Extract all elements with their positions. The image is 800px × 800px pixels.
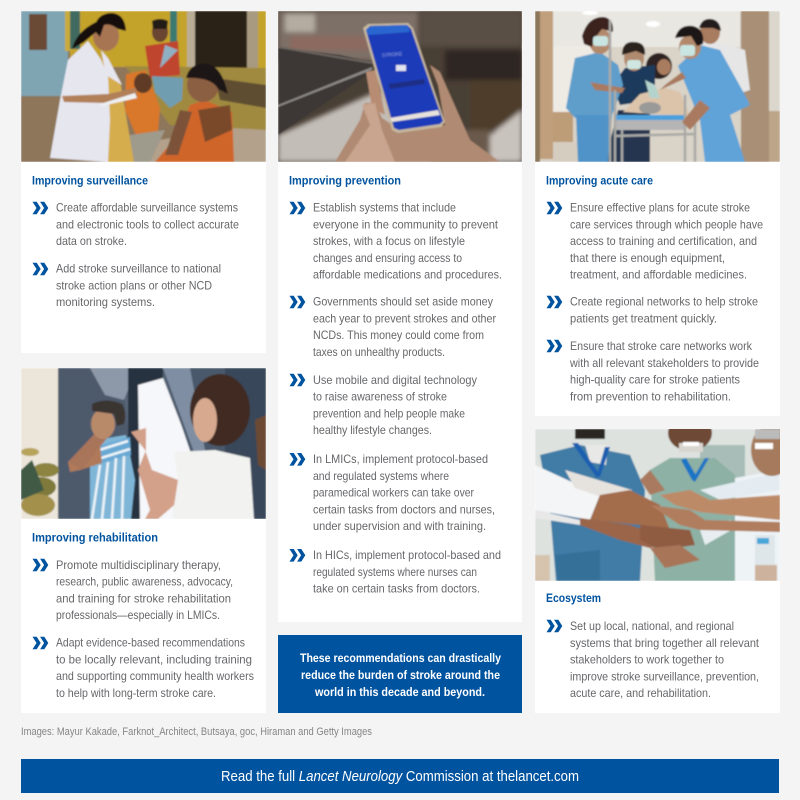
bullet: national plans: Add stroke surveillance to national — [56, 262, 221, 276]
panel: improving prevention — [278, 11, 522, 622]
photo: hand holding phone — [278, 11, 522, 162]
bullet: local and regional systems: stakeholders to work together to — [570, 653, 724, 667]
panel: improving acute care — [535, 11, 780, 416]
bullet: digital technology — [290, 373, 477, 437]
bullet: government money — [290, 294, 496, 359]
image credits: Images: Mayur Kakade, Farknot_Architect, Butsaya, goc, Hiraman and Getty Images — [21, 726, 372, 738]
banner: read the commission — [21, 759, 779, 793]
bullet: digital technology: prevention and help people make — [313, 406, 465, 420]
bullet: local and regional systems: systems that bring together all relevant — [570, 636, 760, 650]
bullet: surveillance systems: data on stroke. — [56, 234, 127, 248]
bullet: national plans: stroke action plans or other NCD — [56, 278, 212, 292]
bullet: local and regional systems: acute care, and rehabilitation. — [570, 686, 711, 700]
bullet: evidence-based recommendations: and supporting community health workers — [56, 669, 254, 683]
bullet: government money: Governments should set aside money — [313, 294, 493, 308]
photo: medical team with stretcher — [535, 11, 780, 162]
bullet: multidisciplinary therapy: research, public awareness, advocacy, — [56, 575, 233, 589]
bullet: community systems: changes and ensuring access to — [313, 251, 462, 265]
bullet: effective plans — [546, 200, 763, 282]
bullet: LMICs: and regulated systems where — [313, 469, 449, 483]
bullet: regional networks — [546, 294, 758, 325]
bullet: effective plans: Ensure effective plans for acute stroke — [570, 200, 750, 214]
bullet: community systems: affordable medications and procedures. — [313, 268, 502, 282]
bullet: effective plans: treatment, and affordable medicines. — [570, 268, 747, 282]
callout: key message — [278, 635, 522, 713]
bullet: multidisciplinary therapy: Promote multidisciplinary therapy, — [56, 558, 221, 572]
bullet: LMICs — [290, 452, 495, 533]
heading: Improving acute care — [546, 174, 653, 188]
callout: key message: world in this decade and beyond. — [314, 685, 485, 699]
bullet: effective plans: care services through which people have — [570, 217, 763, 231]
bullet: HICs — [290, 548, 501, 596]
bullet: LMICs: paramedical workers can take over — [313, 486, 474, 500]
bullet: community systems: Establish systems that include — [313, 200, 456, 214]
bullet: stakeholders: from prevention to rehabilitation. — [570, 389, 731, 403]
heading: Improving surveillance — [32, 174, 148, 188]
bullet: surveillance systems: Create affordable surveillance systems — [56, 200, 238, 214]
bullet: evidence-based recommendations: Adapt evidence-based recommendations — [56, 636, 245, 650]
bullet: community systems: strokes, with a focus on lifestyle — [313, 234, 465, 248]
bullet: digital technology: Use mobile and digital technology — [313, 373, 477, 387]
bullet: LMICs: under supervision and with training. — [313, 519, 486, 533]
photo: health worker with seated women — [21, 11, 266, 162]
panel: ecosystem — [535, 415, 793, 713]
bullet: stakeholders: with all relevant stakeholders to provide — [569, 356, 759, 370]
bullet: LMICs: certain tasks from doctors and nurses, — [313, 502, 495, 516]
bullet: local and regional systems: Set up local, national, and regional — [570, 619, 734, 633]
bullet: community systems — [290, 200, 502, 282]
bullet: evidence-based recommendations: to be locally relevant, including training — [56, 652, 252, 666]
bullet: HICs: take on certain tasks from doctors. — [313, 582, 480, 596]
heading: Ecosystem — [546, 591, 601, 605]
bullet: government money: taxes on unhealthy products. — [313, 345, 445, 359]
banner: read the commission: Read the full Lancet Neurology Commission at thelancet.com — [221, 769, 579, 785]
photo: team stacking hands — [535, 429, 780, 581]
bullet: community systems: everyone in the community to prevent — [313, 217, 499, 231]
bullet: local and regional systems — [546, 619, 760, 700]
panel: improving rehabilitation — [21, 368, 266, 713]
bullet: effective plans: access to training and certification, and — [570, 234, 757, 248]
bullet: stakeholders — [546, 339, 759, 403]
heading: Improving rehabilitation — [32, 530, 158, 544]
callout: key message: These recommendations can drastically — [300, 651, 501, 665]
bullet: surveillance systems: and electronic tools to collect accurate — [56, 217, 239, 231]
bullet: digital technology: to raise awareness of stroke — [313, 390, 447, 404]
bullet: national plans — [32, 262, 221, 309]
bullet: regional networks: Create regional networks to help stroke — [570, 294, 758, 308]
bullet: multidisciplinary therapy — [32, 558, 233, 622]
bullet: multidisciplinary therapy: professionals—especially in LMICs. — [56, 608, 220, 622]
heading: Improving prevention — [289, 174, 401, 188]
bullet: surveillance systems — [32, 200, 239, 248]
panel: improving surveillance — [21, 11, 266, 353]
bullet: regional networks: patients get treatment quickly. — [570, 311, 717, 325]
bullet: HICs: regulated systems where nurses can — [313, 565, 477, 579]
bullet: stakeholders: Ensure that stroke care networks work — [570, 339, 753, 353]
photo: rehabilitation exercise — [21, 368, 266, 519]
bullet: effective plans: that there is enough equipment, — [570, 251, 725, 265]
bullet: evidence-based recommendations — [32, 636, 254, 700]
bullet: digital technology: healthy lifestyle changes. — [313, 423, 432, 437]
bullet: government money: NCDs. This money could come from — [313, 328, 484, 342]
bullet: stakeholders: high-quality care for stroke patients — [570, 373, 740, 387]
bullet: HICs: In HICs, implement protocol-based and — [313, 548, 501, 562]
photo: hand holding phone: STROKE — [382, 51, 403, 59]
bullet: national plans: monitoring systems. — [56, 295, 155, 309]
bullet: multidisciplinary therapy: and training for stroke rehabilitation — [56, 591, 231, 605]
bullet: evidence-based recommendations: to help with long-term stroke care. — [56, 686, 216, 700]
bullet: local and regional systems: improve stroke surveillance, prevention, — [570, 669, 759, 683]
bullet: LMICs: In LMICs, implement protocol-based — [313, 452, 488, 466]
bullet: government money: each year to prevent strokes and other — [313, 311, 496, 325]
callout: key message: reduce the burden of stroke around the — [301, 668, 500, 682]
